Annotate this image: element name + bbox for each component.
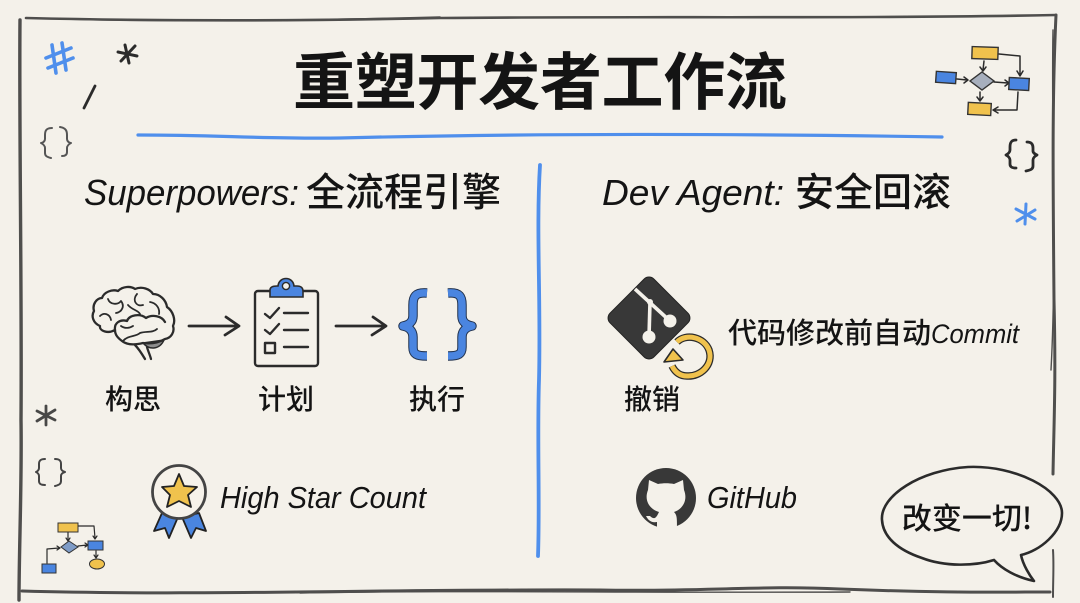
title underline [138, 134, 942, 138]
icon: blue code braces [403, 293, 472, 356]
icon: award medal [152, 466, 206, 538]
arrow: brain to plan [189, 317, 239, 335]
label: execute: 执行 [409, 378, 465, 418]
heading: Dev Agent: Dev Agent: [602, 172, 784, 213]
icon: yellow undo arrow [664, 337, 710, 376]
label: ideation: 构思 [105, 378, 161, 418]
arrow: plan to execute [336, 317, 386, 335]
heading: Superpowers: 全流程引擎 [306, 162, 501, 218]
icon: clipboard [255, 278, 318, 366]
icon: blue hash [46, 43, 73, 73]
text: High Star Count: High Star Count [220, 480, 427, 515]
icon: github logo [636, 468, 696, 528]
icon: flowchart top right [936, 47, 1029, 116]
center divider [538, 165, 540, 556]
heading: Superpowers [84, 162, 501, 218]
heading: Dev Agent [602, 162, 951, 218]
heading: Superpowers: Superpowers: [84, 172, 299, 213]
icon: flowchart bottom left [42, 523, 104, 573]
text: auto commit [728, 310, 1020, 352]
icon: right braces [1006, 140, 1037, 171]
icon: left braces bottom [36, 459, 65, 486]
label: undo: 撤销 [624, 378, 680, 418]
icon: git logo [605, 274, 693, 362]
icon: brain [93, 287, 174, 359]
icon: left asterisk [37, 406, 55, 425]
heading: Dev Agent: 安全回滚 [795, 162, 951, 218]
icon: slash [84, 86, 95, 108]
label: plan: 计划 [258, 378, 314, 418]
text: GitHub: GitHub [707, 480, 797, 515]
icon: left braces top [41, 127, 71, 158]
callout text: 改变一切! [902, 494, 1032, 538]
icon: asterisk top [118, 45, 137, 63]
icon: blue asterisk [1016, 204, 1035, 224]
title: 重塑开发者工作流 [293, 32, 787, 122]
callout: speech bubble [882, 467, 1062, 581]
text: auto commit: 代码修改前自动 [728, 310, 931, 352]
text: auto commit: Commit [931, 319, 1020, 349]
